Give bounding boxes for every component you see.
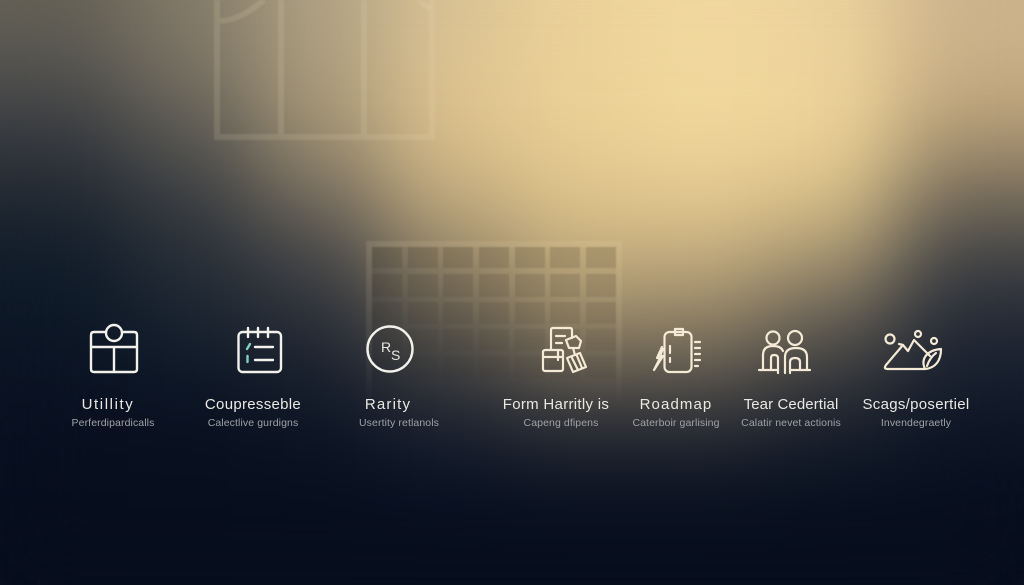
column: Roadmap: Caterboir garlising bbox=[632, 417, 720, 429]
column: Utility: Perferdipardicalls bbox=[72, 417, 154, 429]
column: Coupresseble: Coupresseble bbox=[205, 396, 301, 413]
column: Tear Cedertial: Calatir nevet actionis bbox=[741, 417, 841, 429]
column: Rarity: Usertity retlanols bbox=[359, 417, 439, 429]
column: Tear Cedertial: Tear Cedertial bbox=[744, 396, 838, 413]
icon: two people bbox=[759, 331, 810, 373]
icon: checklist calendar bbox=[238, 328, 281, 372]
icon: clipboard with pen bbox=[654, 329, 700, 372]
icon: RS circle: R bbox=[381, 339, 391, 355]
column: Utility: Utillity bbox=[82, 396, 134, 413]
icon: mountains and leaf bbox=[885, 331, 941, 369]
column: Rarity: Rarity bbox=[365, 396, 411, 413]
column: Scags/posertiel bbox=[862, 396, 970, 429]
column: Coupresseble: Calectlive gurdigns bbox=[208, 417, 298, 429]
column: Scags/posertiel: Scags/posertiel bbox=[862, 396, 970, 413]
column: Roadmap: Roadmap bbox=[640, 396, 712, 413]
column: Tear Cedertial bbox=[741, 396, 841, 429]
column: Coupresseble bbox=[205, 396, 301, 429]
icon: RS circle: S bbox=[391, 347, 400, 363]
column: Rarity bbox=[359, 396, 439, 429]
icon: RS circle bbox=[368, 326, 412, 372]
column: Scags/posertiel: Invendegraetly bbox=[881, 417, 951, 429]
column: Form Harritly is bbox=[503, 396, 609, 429]
icon: documents and tools bbox=[543, 328, 586, 372]
column: Utility bbox=[72, 396, 154, 429]
icon: utility panel with circle bbox=[91, 325, 137, 372]
column: Roadmap bbox=[632, 396, 720, 429]
column: Form Harritly is: Capeng dfipens bbox=[524, 417, 598, 429]
column: Form Harritly is: Form Harritly is bbox=[503, 396, 609, 413]
